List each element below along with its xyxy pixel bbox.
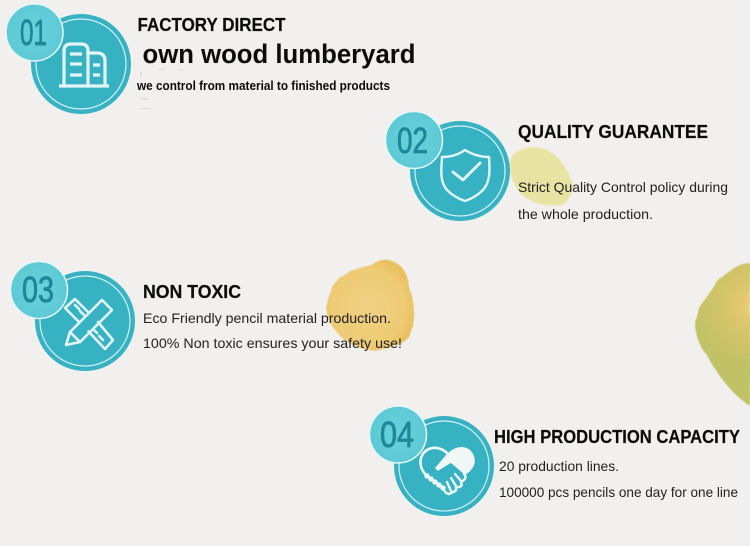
number badge 03: 03	[22, 269, 54, 310]
text: capacity description	[499, 458, 738, 500]
text: quality description: the whole production.	[518, 206, 653, 222]
panel: 01 factory direct	[6, 4, 416, 114]
text: capacity description: 100000 pcs pencils one day for one line	[499, 484, 738, 500]
watercolor blob: pale yellow	[510, 148, 573, 205]
icon circle 01	[31, 14, 131, 114]
text: capacity description: 20 production lines.	[499, 458, 619, 474]
panel: 03 non toxic	[10, 262, 402, 371]
icon: shield	[441, 150, 489, 201]
heading: own wood lumberyard: own wood lumberyard	[142, 39, 416, 69]
heading: factory direct: FACTORY DIRECT	[138, 15, 286, 35]
text: quality description: Strict Quality Control policy during	[518, 179, 728, 195]
panel: 02 quality guarantee	[386, 112, 728, 222]
number badge 03	[10, 262, 68, 318]
text: non toxic description: 100% Non toxic ensures your safety use!	[143, 335, 402, 351]
watercolor blob: green right edge	[696, 263, 750, 406]
number badge 02	[386, 112, 442, 168]
text: non toxic description: Eco Friendly pencil material production.	[143, 310, 391, 326]
icon: pencil and ruler	[65, 299, 113, 349]
number badge 01	[6, 4, 63, 61]
number badge 01: 01	[20, 12, 47, 53]
heading: quality guarantee: QUALITY GUARANTEE	[518, 122, 708, 142]
number badge 04	[370, 406, 426, 463]
text: quality description	[518, 179, 728, 222]
number badge 04: 04	[380, 414, 414, 455]
text: non toxic description	[143, 310, 402, 351]
icon circle 03	[35, 271, 135, 371]
icon: buildings	[59, 44, 109, 86]
icon circle 02	[410, 121, 510, 221]
heading: non toxic: NON TOXIC	[143, 282, 241, 302]
icon circle 04	[394, 416, 494, 516]
watercolor blob: orange	[326, 260, 414, 350]
number badge 02: 02	[397, 120, 428, 161]
panel: 04 high production capacity	[370, 406, 740, 516]
icon: heart handshake	[420, 448, 474, 494]
faint specks under panel 1	[140, 69, 184, 109]
text: we control: we control from material to finished products	[136, 79, 390, 93]
